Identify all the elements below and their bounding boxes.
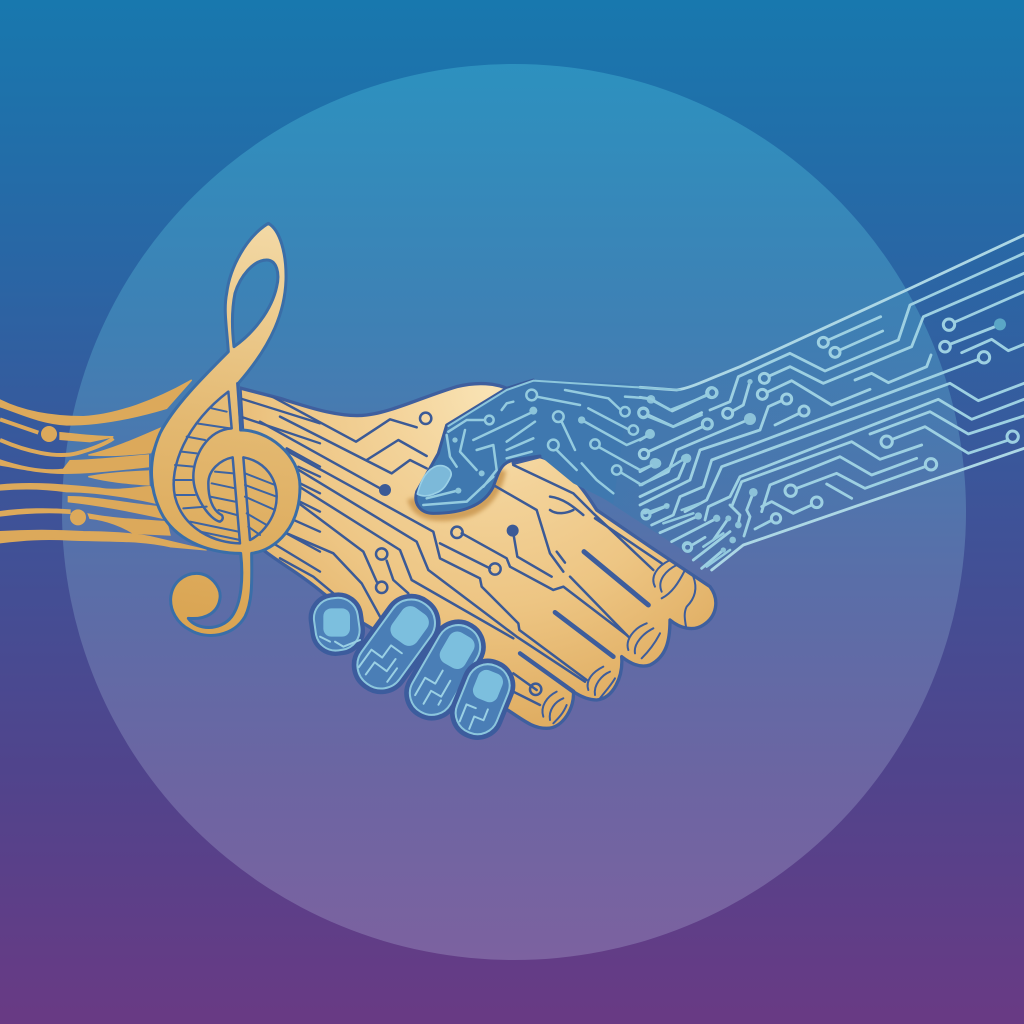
circuit traces on the arm	[639, 235, 1024, 570]
palm circuit lines	[260, 390, 662, 705]
hand silhouette	[240, 384, 716, 728]
clef staff hatching	[173, 408, 277, 540]
musical staff strands on the left	[0, 380, 207, 550]
knuckle creases	[542, 560, 695, 723]
thumb outline	[416, 380, 540, 513]
fingertip small	[308, 592, 366, 657]
clef inner outlines	[174, 383, 277, 543]
hand traces	[423, 388, 730, 567]
dots on palm	[379, 484, 519, 537]
fingertip third	[398, 613, 492, 727]
translucent circle	[62, 64, 966, 960]
clef silhouette	[152, 223, 300, 635]
finger slits	[520, 552, 648, 692]
thumb silhouette	[416, 380, 630, 513]
thumb shadow on palm	[412, 470, 502, 516]
blue circuit hand: thumb and knuckles	[308, 380, 730, 745]
golden hand	[240, 384, 716, 728]
fingertip fourth	[445, 654, 520, 745]
lines between the clef and the arm	[240, 398, 320, 572]
fingertip second	[344, 586, 449, 702]
treble clef	[152, 223, 300, 635]
thumbnail	[417, 466, 451, 496]
translucent circuit arm body	[533, 235, 1024, 570]
